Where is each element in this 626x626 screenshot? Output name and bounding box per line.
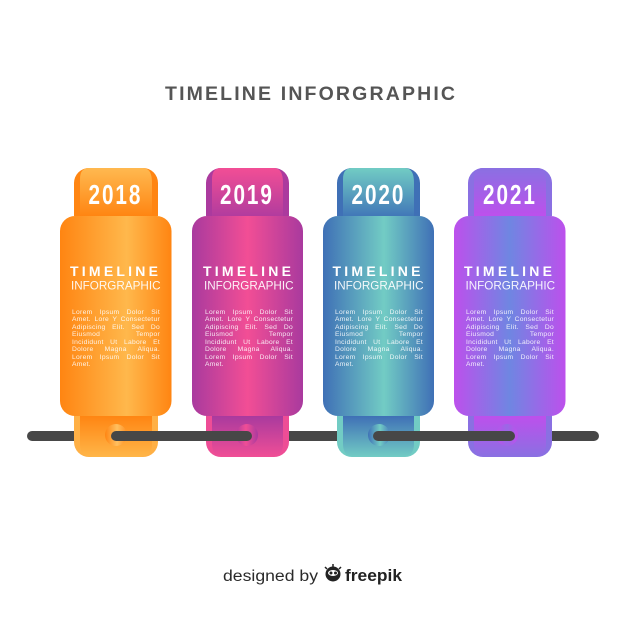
text block 2018: Lorem Ipsum Dolor Sit [72,354,160,361]
text block 2020: Amet. [335,361,354,368]
title: TIMELINE INFORGRAPHIC [165,83,455,105]
text block 2018: Amet. Lore Y Consectetur [72,316,160,323]
panel: 2019 [192,168,303,457]
heading 2021: INFORGRAPHIC [466,278,555,292]
top tab 2019 [206,168,289,216]
heading 2021 [464,263,555,292]
hole 2021 [496,424,518,446]
text block 2021: Adipiscing Elit. Sed Do [466,324,554,331]
text block 2020 [335,309,423,368]
front timeline bar left [111,431,252,441]
hole 2018 [105,424,127,446]
text block 2021: Lorem Ipsum Dolor Sit [466,309,554,316]
year 2021: 2021 [483,180,537,211]
body 2019 [192,216,303,416]
hole 2020 [368,424,390,446]
heading 2019: INFORGRAPHIC [204,278,294,292]
heading 2020 [332,263,424,292]
top tab 2021 [468,168,552,216]
heading 2019: TIMELINE [203,263,291,279]
bottom tab 2018 [74,410,158,457]
text block 2021: Amet. [466,361,485,368]
text block 2020: Lorem Ipsum Dolor Sit [335,354,423,361]
text block 2019 [205,309,293,368]
top tab 2020 [337,168,420,216]
text block 2021: Dolore Magna Aliqua. [466,346,554,353]
text block 2020: Eiusmod Tempor [335,331,423,338]
text block 2018: Amet. [72,361,91,368]
heading 2018 [70,263,161,292]
body 2018 [60,216,172,416]
text block 2019: Lorem Ipsum Dolor Sit [205,309,293,316]
text block 2019: Amet. [205,361,224,368]
hole 2019 [236,424,258,446]
front timeline bar right [373,431,515,441]
text block 2019: Lorem Ipsum Dolor Sit [205,354,293,361]
panel: 2021 [454,168,566,457]
text block 2021: Lorem Ipsum Dolor Sit [466,354,554,361]
icon: freepik logo [325,564,341,582]
text block 2018: Lorem Ipsum Dolor Sit [72,309,160,316]
footer credit: designed by [223,568,318,585]
text block 2019: Amet. Lore Y Consectetur [205,316,293,323]
body 2021 [454,216,566,416]
text block 2020: Lorem Ipsum Dolor Sit [335,309,423,316]
text block 2021: Eiusmod Tempor [466,331,554,338]
year 2018: 2018 [88,180,142,211]
year 2019: 2019 [220,180,274,211]
text block 2021 [466,309,554,368]
year 2020: 2020 [352,180,405,211]
text block 2019: Eiusmod Tempor [205,331,293,338]
heading 2020: TIMELINE [332,263,420,279]
heading 2018: INFORGRAPHIC [71,278,161,292]
bottom tab 2021 [468,410,552,457]
text block 2021: Amet. Lore Y Consectetur [466,316,554,323]
heading 2019 [203,263,294,292]
back timeline bar [27,431,599,441]
bottom tab 2020 [337,410,420,457]
text block 2020: Adipiscing Elit. Sed Do [335,324,423,331]
body 2020 [323,216,434,416]
text block 2020: Amet. Lore Y Consectetur [335,316,423,323]
text block 2018: Dolore Magna Aliqua. [72,346,160,353]
text block 2018: Incididunt Ut Labore Et [72,339,160,346]
footer credit [223,564,403,585]
text block 2021: Incididunt Ut Labore Et [466,339,554,346]
panel: 2018 [60,168,172,457]
heading 2021: TIMELINE [464,263,552,279]
heading 2018: TIMELINE [70,263,158,279]
text block 2019: Adipiscing Elit. Sed Do [205,324,293,331]
text block 2019: Dolore Magna Aliqua. [205,346,293,353]
text block 2020: Incididunt Ut Labore Et [335,339,423,346]
bottom tab 2019 [206,410,289,457]
text block 2019: Incididunt Ut Labore Et [205,339,293,346]
text block 2018: Eiusmod Tempor [72,331,160,338]
text block 2020: Dolore Magna Aliqua. [335,346,423,353]
footer credit: freepik [345,567,403,585]
text block 2018: Adipiscing Elit. Sed Do [72,324,160,331]
text block 2018 [72,309,160,368]
panel: 2020 [323,168,434,457]
top tab 2018 [74,168,158,216]
heading 2020: INFORGRAPHIC [334,278,424,292]
